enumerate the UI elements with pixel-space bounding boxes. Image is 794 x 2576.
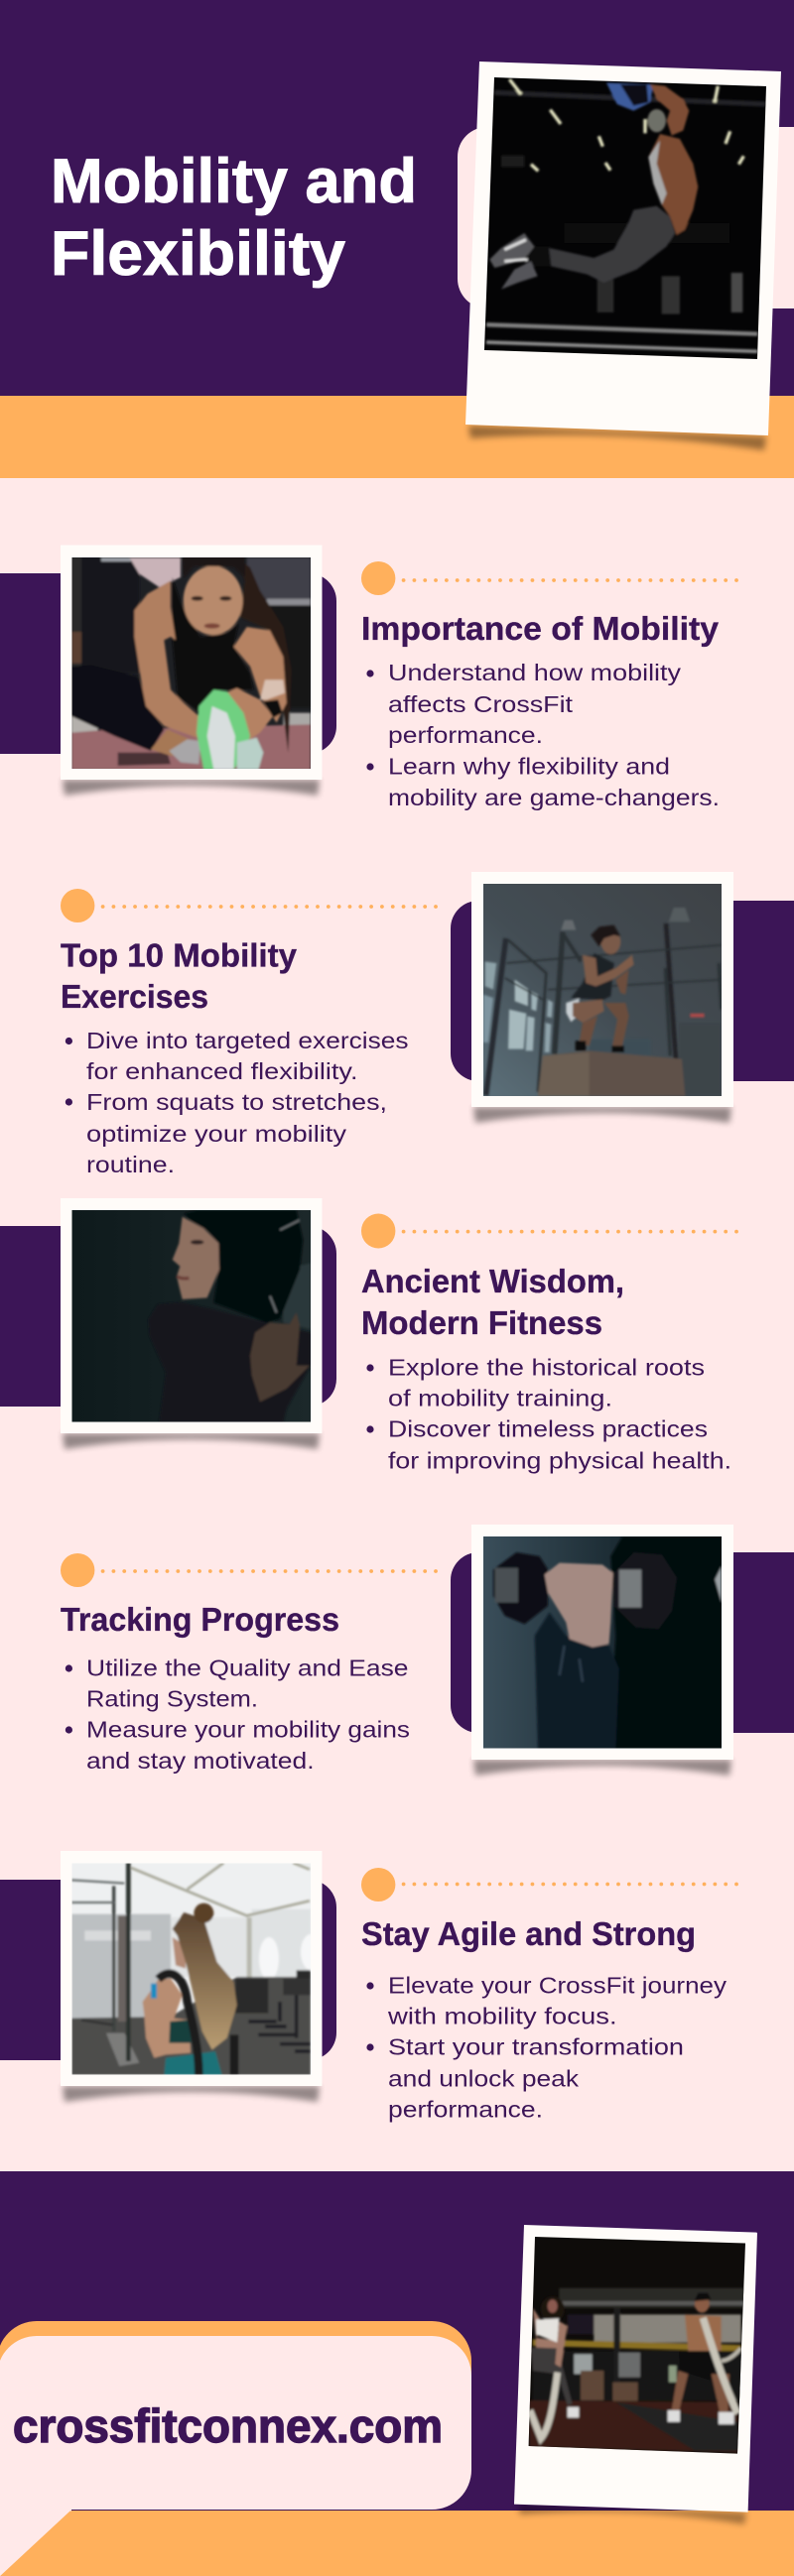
frame shadow — [63, 1433, 320, 1449]
bullet list: routine. — [86, 1152, 175, 1177]
photo: battle ropes — [526, 2232, 749, 2456]
bullet list: Rating System. — [86, 1685, 258, 1711]
title: Flexibility — [51, 219, 345, 289]
bullet list: Learn why flexibility and — [388, 754, 670, 780]
purple backing shape — [451, 1552, 794, 1733]
bullet list: of mobility training. — [388, 1385, 612, 1411]
section 5: stay agile and strong — [0, 1851, 738, 2123]
photo frame — [61, 1851, 322, 2086]
photo: woman in hijab — [71, 1210, 312, 1422]
bullet list — [366, 660, 720, 810]
bullet list: mobility are game-changers. — [388, 785, 720, 810]
marker: circle and dotted line — [361, 561, 738, 595]
website url: crossfitconnex.com — [13, 2399, 443, 2452]
photo frame — [471, 1525, 733, 1760]
bullet list — [66, 1028, 409, 1177]
bullet list: Explore the historical roots — [388, 1355, 705, 1381]
bullet list: Understand how mobility — [388, 660, 681, 685]
bullet list — [366, 1972, 727, 2123]
heading: Top 10 Mobility — [61, 936, 298, 974]
bullet list: Elevate your CrossFit journey — [388, 1972, 727, 1998]
bullet list: and stay motivated. — [86, 1748, 315, 1774]
photo: box jump — [483, 884, 722, 1096]
frame shadow — [473, 1760, 731, 1776]
heading: Importance of Mobility — [361, 610, 720, 647]
bullet list: From squats to stretches, — [86, 1089, 387, 1115]
heading: Ancient Wisdom, — [361, 1263, 624, 1299]
purple backing shape — [0, 1880, 336, 2060]
hero polaroid — [465, 61, 781, 450]
bullet list — [66, 1655, 410, 1774]
heading — [361, 1263, 624, 1341]
bullet list: optimize your mobility — [86, 1121, 346, 1147]
bullet list: Measure your mobility gains — [86, 1716, 410, 1742]
section 1: importance of mobility — [0, 546, 738, 810]
photo frame — [61, 546, 322, 780]
footer website bubble — [0, 2321, 471, 2512]
purple backing shape — [451, 901, 794, 1081]
marker: circle and dotted line — [361, 1868, 738, 1901]
marker: circle and dotted line — [61, 889, 438, 922]
marker: circle and dotted line — [61, 1553, 438, 1587]
frame shadow — [63, 780, 320, 796]
header panel — [0, 0, 794, 478]
heading — [61, 936, 298, 1015]
bullet list: and unlock peak — [388, 2065, 579, 2091]
section 3: ancient wisdom, modern fitness — [0, 1198, 738, 1473]
title: Mobility and — [51, 147, 417, 216]
purple backing shape — [0, 1226, 336, 1407]
frame shadow — [473, 1107, 731, 1123]
bullet list: Start your transformation — [388, 2034, 684, 2060]
purple backing shape — [0, 573, 336, 754]
heading: Modern Fitness — [361, 1304, 602, 1341]
heading: Tracking Progress — [61, 1601, 339, 1638]
bullet list: for enhanced flexibility. — [86, 1058, 357, 1084]
bullet list: performance. — [388, 722, 543, 748]
bullet list: Utilize the Quality and Ease — [86, 1655, 409, 1680]
footer polaroid — [514, 2225, 757, 2524]
section 2: top 10 mobility exercises — [61, 872, 794, 1177]
bullet list: affects CrossFit — [388, 691, 574, 717]
footer panel — [0, 2171, 794, 2576]
section 4: tracking progress — [61, 1525, 794, 1776]
photo: woman with battle rope — [71, 1863, 322, 2075]
bullet list: Dive into targeted exercises — [86, 1028, 409, 1053]
bullet list: with mobility focus. — [387, 2004, 617, 2029]
bullet list — [366, 1355, 731, 1473]
bullet list: Discover timeless practices — [388, 1416, 708, 1442]
bullet list: for improving physical health. — [388, 1447, 731, 1473]
heading: Exercises — [61, 978, 208, 1015]
photo frame — [471, 872, 733, 1107]
photo: dumbbell curl — [483, 1536, 722, 1749]
marker: circle and dotted line — [361, 1214, 738, 1248]
title — [51, 147, 417, 289]
bullet list: performance. — [388, 2097, 543, 2123]
frame shadow — [63, 2086, 320, 2102]
photo: woman stretching — [71, 557, 312, 770]
heading: Stay Agile and Strong — [361, 1915, 696, 1952]
photo frame — [61, 1198, 322, 1433]
